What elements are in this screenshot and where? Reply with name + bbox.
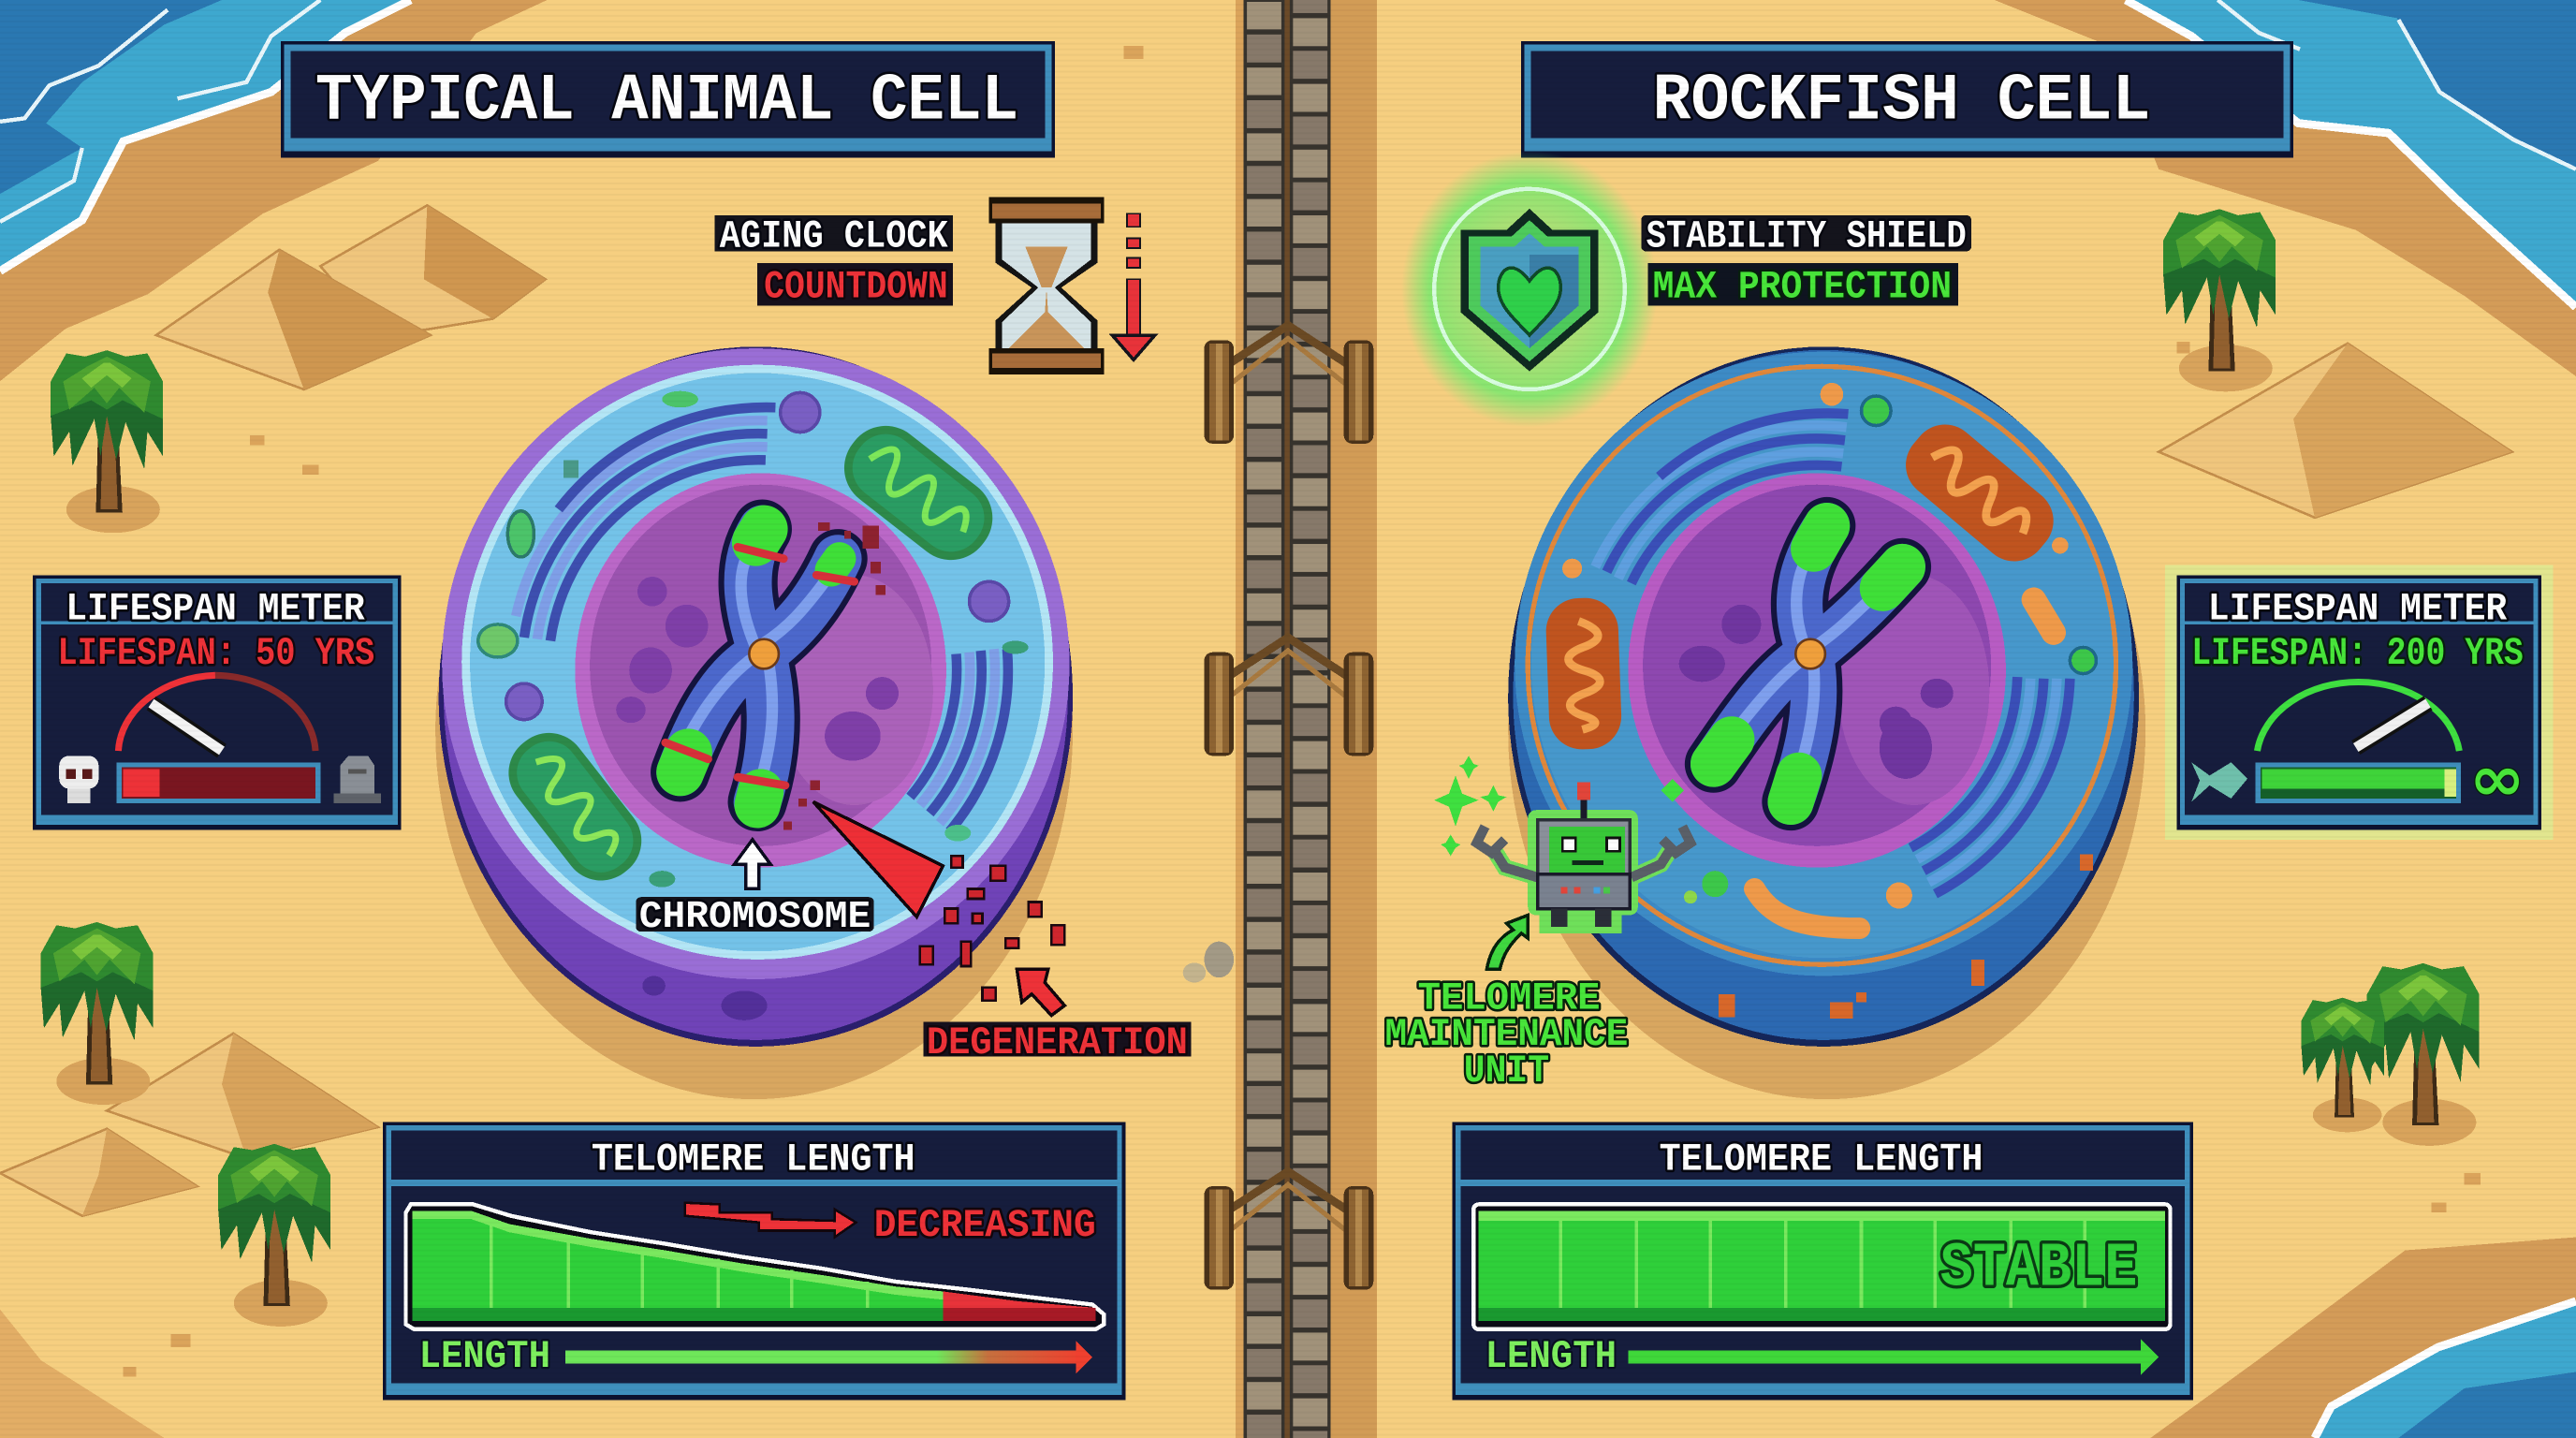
icon: hourglass <box>989 198 1104 374</box>
arms and pincers <box>1492 846 1673 877</box>
length arrow <box>565 1341 1092 1373</box>
central stone wall <box>1236 0 1377 1438</box>
chromosome label: CHROMOSOME <box>639 896 871 939</box>
telomere maintenance unit label: TELOMERE <box>1418 976 1600 1021</box>
length label: LENGTH <box>1486 1334 1617 1379</box>
panel: lifespan meter 200 yrs <box>2165 565 2553 840</box>
sand dune top-right <box>2159 344 2511 518</box>
palm tree 1 <box>51 350 163 533</box>
icon: infinity: ∞ <box>2469 742 2525 815</box>
nucleus <box>575 473 946 868</box>
telomere maintenance unit label: MAINTENANCE <box>1385 1012 1628 1057</box>
mitochondrion upper right <box>1893 411 2067 575</box>
palm tree 6 <box>2302 998 2384 1132</box>
length arrow <box>1628 1339 2159 1375</box>
panel: lifespan meter 50 yrs <box>33 575 401 829</box>
telomere bar <box>1473 1204 2170 1329</box>
pebbles <box>1183 942 1234 983</box>
title panel: rockfish cell <box>1521 41 2293 157</box>
panel: telomere length decreasing <box>383 1123 1125 1400</box>
cell top face <box>1515 352 2132 976</box>
cytoplasm <box>461 365 1053 960</box>
heading: TELOMERE LENGTH <box>1660 1137 1983 1182</box>
title text: ROCKFISH CELL <box>1653 65 2150 139</box>
title text: TYPICAL ANIMAL CELL <box>315 65 1018 139</box>
max protection label: MAX PROTECTION <box>1653 265 1952 310</box>
panel: rockfish cell <box>1508 346 2145 1099</box>
countdown label: COUNTDOWN <box>764 265 948 310</box>
stability shield label: STABILITY SHIELD <box>1647 213 1967 258</box>
top-right ocean and shore <box>1995 0 2576 376</box>
palm tree 5 <box>2367 963 2480 1146</box>
mitochondrion upper right <box>828 410 1008 576</box>
rope fence bottom <box>1204 1171 1373 1290</box>
arrow: degeneration red arrow <box>1017 969 1064 1016</box>
lifespan bar <box>117 762 320 803</box>
gauge arc <box>2257 682 2459 751</box>
nucleus <box>1628 473 2006 868</box>
palm tree 4 <box>2163 209 2276 391</box>
organelles <box>478 391 1029 888</box>
cell membrane <box>442 348 1070 979</box>
title panel: typical animal cell <box>281 41 1055 157</box>
chromosome <box>1714 526 1902 801</box>
gauge arc <box>118 675 215 751</box>
gauge needle <box>2356 703 2428 748</box>
arrow: degeneration pointer <box>813 801 943 917</box>
cell body <box>1508 346 2139 1047</box>
stable label: STABLE <box>1940 1233 2137 1304</box>
sparkles <box>1434 756 1684 856</box>
chromosome <box>666 529 855 805</box>
length label: LENGTH <box>419 1334 550 1379</box>
organelles <box>1562 383 2096 929</box>
orange membrane ring <box>1528 366 2116 964</box>
panel: typical animal cell <box>435 346 1073 1099</box>
golgi and reticulum <box>516 407 1008 831</box>
palm tree 2 <box>41 922 154 1105</box>
heading: LIFESPAN METER <box>2208 587 2508 632</box>
heading: TELOMERE LENGTH <box>592 1137 915 1182</box>
top-left ocean and shore <box>0 0 547 381</box>
telomere maintenance unit label: UNIT <box>1464 1049 1549 1093</box>
icon: telomere maintenance robot <box>1434 756 1690 933</box>
body <box>1538 874 1630 909</box>
sand dunes bottom-left <box>0 1034 378 1216</box>
rope fence top <box>1204 325 1373 444</box>
cell ground shadow <box>435 363 1073 1099</box>
arrow: robot pointer <box>1486 916 1528 969</box>
mitochondrion lower left <box>493 718 657 896</box>
antenna <box>1580 799 1587 818</box>
golgi and reticulum <box>1595 413 2070 894</box>
icon: tombstone <box>333 756 381 803</box>
gauge needle <box>152 703 222 751</box>
lifespan value: LIFESPAN: 50 YRS <box>57 631 374 676</box>
degeneration label: DEGENERATION <box>927 1020 1188 1065</box>
heading: LIFESPAN METER <box>66 587 365 632</box>
palm tree 3 <box>218 1144 330 1327</box>
cell body <box>439 346 1073 1047</box>
legs <box>1551 909 1567 927</box>
cell ground shadow <box>1508 363 2145 1099</box>
lifespan bar <box>2256 762 2461 803</box>
icon: skull <box>59 756 98 803</box>
panel: telomere length stable <box>1453 1123 2193 1400</box>
telomere maintenance unit label <box>1385 976 1628 1093</box>
head <box>1536 818 1632 875</box>
sand dunes top-left <box>156 205 546 389</box>
broken telomere fragments <box>783 522 886 829</box>
icon: fish <box>2191 762 2247 801</box>
icon: stability shield <box>1401 151 1658 427</box>
aging clock label: AGING CLOCK <box>720 213 948 258</box>
decreasing label: DECREASING <box>874 1203 1096 1248</box>
degeneration debris <box>920 856 1064 1001</box>
telomere bar <box>406 1204 1104 1329</box>
arrow: countdown down arrow <box>1112 213 1155 360</box>
bottom-right ocean and shore <box>2150 1238 2576 1438</box>
bottom-left wet sand <box>0 1310 165 1438</box>
arrow: decreasing <box>685 1203 856 1238</box>
rope fence middle <box>1204 638 1373 756</box>
arrow: chromosome pointer <box>735 840 770 888</box>
mitochondrion left <box>1545 597 1622 751</box>
